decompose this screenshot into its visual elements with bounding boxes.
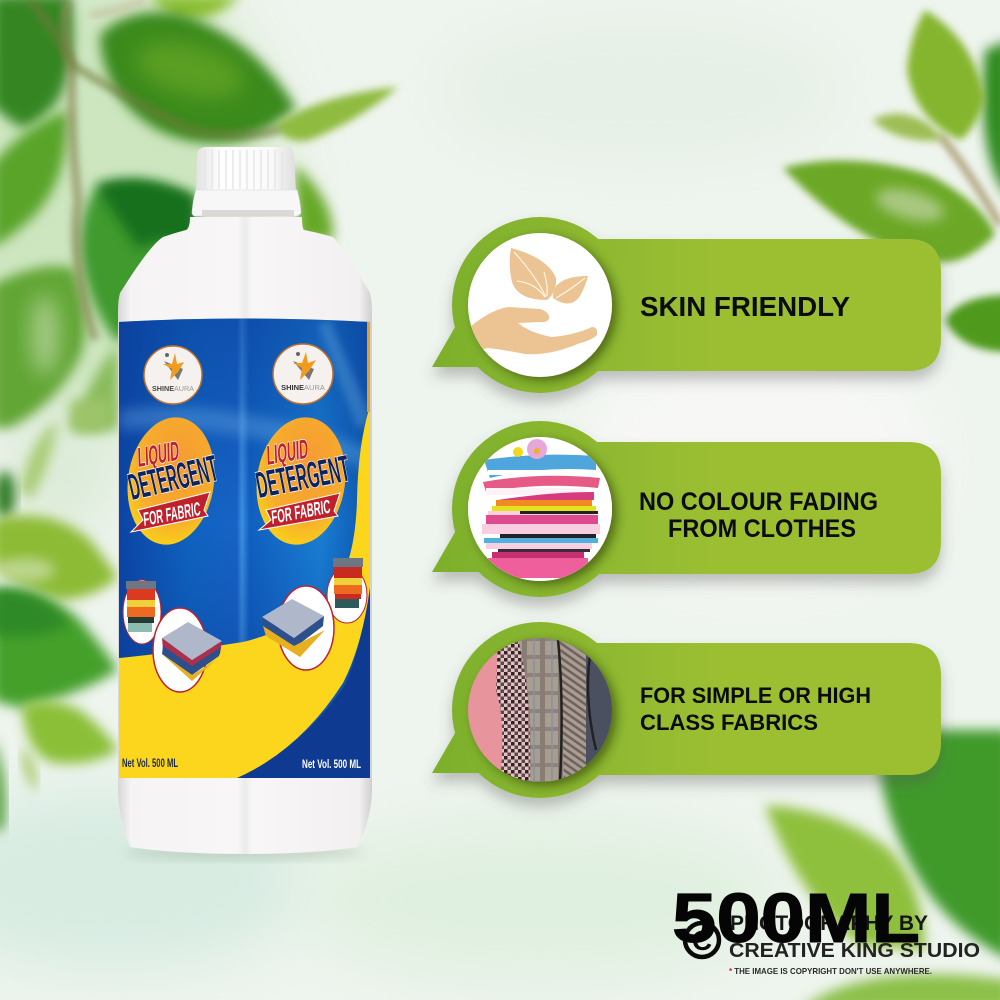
bottle body [118,217,372,854]
card: simple or high class fabrics [432,622,941,798]
badge left: FOR FABRIC [143,499,201,531]
label: CLASS FABRICS [640,710,818,735]
net volume right: Net Vol. 500 ML [302,759,361,771]
navy corner [238,588,370,778]
logo left: SHINEAURA [152,384,194,393]
laundry circle right small [327,558,367,623]
watermark credit: * THE IMAGE IS COPYRIGHT DON'T USE ANYWHERE. [729,966,932,976]
label: SKIN FRIENDLY [640,291,850,322]
icon: copyright: C [692,925,712,956]
card: no colour fading [432,421,941,597]
photo: fabrics [468,638,614,782]
watermark credit [729,912,980,976]
green bubble [432,421,941,597]
logo right: SHINEAURA [281,383,325,392]
bottle [118,147,372,859]
badge left [126,417,217,545]
background leaves: lower left [0,400,118,830]
logo right [273,344,333,404]
background leaves: right [783,10,1000,352]
logo left [144,346,202,404]
net volume left: Net Vol. 500 ML [122,758,178,770]
bottle label: DETERGENT [253,448,353,506]
bottle shadow [125,845,365,859]
badge right [254,417,348,545]
laundry circle left large [153,608,222,692]
badge right: LIQUID [266,433,309,471]
laundry circle right large [262,586,334,670]
card: skin friendly [432,217,941,393]
volume heading: 500ML [672,879,920,957]
background leaves: top left [0,0,398,430]
badge left: LIQUID [137,435,180,473]
bottle label [119,314,372,778]
bottle cap [192,147,301,216]
watermark credit: PHOTOGRAPHY BY [730,912,928,935]
label: FOR SIMPLE OR HIGH [640,683,871,708]
laundry circle left small [123,580,161,644]
badge right: FOR FABRIC [271,497,331,529]
label: FROM CLOTHES [668,515,856,543]
yellow swoosh [119,400,372,778]
bottle label: DETERGENT [125,448,222,508]
watermark credit: CREATIVE KING STUDIO [729,940,980,962]
label [640,683,871,735]
icon: copyright [685,923,719,957]
green bubble [432,622,941,798]
background leaves: bottom right [765,730,1000,1000]
green bubble [432,217,941,393]
photo: folded clothes [468,437,612,581]
icon: hand with leaves [468,233,612,377]
label [639,488,878,543]
label: NO COLOUR FADING [639,488,878,516]
